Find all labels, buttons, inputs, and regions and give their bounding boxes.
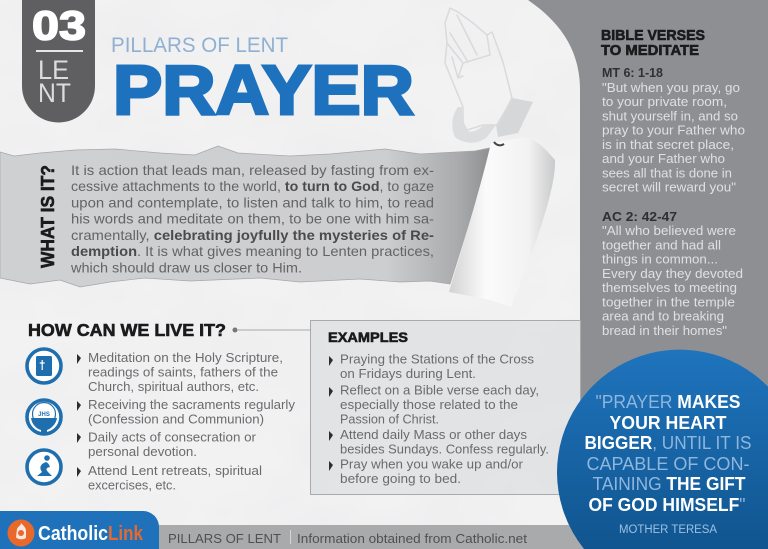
text block: Matthew verse (602, 66, 745, 194)
bullet item: meditation: Church, spiritual authors, etc. (88, 380, 259, 394)
bullet item: pray: Pray when you wake up and/or (340, 458, 523, 472)
heading: bible verses: TO MEDITATE (601, 43, 699, 59)
callout: Mother Teresa quote: TAINING THE GIFT (592, 474, 746, 494)
bullet item: bible verse (329, 384, 539, 426)
text block: Matthew verse: sees all that is done in (602, 166, 732, 180)
icon: hands sleeve shadow (452, 107, 496, 143)
bullet item: bible verse: Passion of Christ. (340, 412, 439, 426)
icon: praying hands (445, 8, 533, 143)
heading: how can we live it: HOW CAN WE LIVE IT? (28, 320, 226, 340)
text block: Matthew verse: is in that secret place, (602, 138, 734, 152)
bullet item: mass (329, 428, 549, 456)
text block: Acts verse: area and to breaking (602, 310, 724, 324)
panel: torn band what is it (0, 146, 494, 287)
logo: Catholic Link: Link (108, 523, 144, 545)
text block: description: upon and contemplate, to listen and talk to him, to read (71, 196, 434, 210)
bullet item: sacraments (77, 398, 296, 426)
badge: 03 Lent: NT (38, 78, 71, 108)
bullet item: meditation: readings of saints, fathers of the (88, 366, 278, 380)
heading: pillars of lent: PILLARS OF LENT (111, 34, 288, 57)
bullet item: meditation: Meditation on the Holy Scripture, (88, 351, 283, 365)
callout: Mother Teresa quote: YOUR HEART (610, 413, 726, 433)
bullet item: retreats: Attend Lent retreats, spiritual (88, 464, 262, 478)
heading: how can we live it (28, 320, 310, 340)
callout: Mother Teresa quote: MOTHER TERESA (619, 524, 717, 536)
bullet item: bible verse: especially those related to the (340, 398, 518, 412)
panel: crumpled paper background (0, 0, 580, 549)
text block: Matthew verse: "But when you pray, go (602, 81, 740, 95)
bullet item: pray: before going to bed. (340, 472, 461, 486)
bullet item: sacraments: (Confession and Communion) (88, 412, 264, 426)
heading: examples: EXAMPLES (328, 329, 408, 345)
text block: Matthew verse: secret will reward you" (602, 180, 736, 194)
text block: Acts verse: together in the temple (602, 296, 735, 310)
footer bar (150, 525, 590, 549)
bullet item: mass: besides Sundays. Confess regularly. (340, 442, 549, 456)
text block: Acts verse (602, 210, 743, 338)
text block: Acts verse: AC 2: 42-47 (602, 210, 677, 224)
text block: Matthew verse: MT 6: 1-18 (602, 66, 663, 80)
text block: description: It is action that leads man, released by fasting from ex- (71, 163, 434, 178)
text block: Matthew verse: shut yourself in, and so (602, 110, 738, 124)
text block: Acts verse: "All who believed were (602, 224, 736, 238)
text block: description: cessive attachments to the world, to turn to God , to gaze (71, 179, 434, 194)
text block: Acts verse: bread in their homes" (602, 324, 727, 338)
icon: curled paper roll (449, 137, 555, 307)
badge: 03 Lent (22, 0, 95, 122)
text block: Matthew verse: to your private room, (602, 95, 727, 109)
callout: Mother Teresa quote: OF GOD HIMSELF" (588, 495, 746, 515)
bullet item: stations: on Fridays during Lent. (340, 367, 476, 381)
bullet item: meditation (77, 351, 283, 394)
logo: Catholic Link: Catholic (38, 523, 108, 545)
text block: Acts verse: Every day they devoted (602, 267, 743, 281)
icon: hands cuff (496, 98, 533, 137)
bullet item: pray (329, 458, 523, 486)
heading: bible verses (601, 28, 705, 59)
badge: 03 Lent: 03 (32, 2, 86, 48)
footer bar: Information obtained from Catholic.net (297, 531, 527, 546)
bullet item: consecration: personal devotion. (88, 445, 197, 459)
text block: Acts verse: together and had all (602, 238, 721, 252)
text block: description: cramentally, celebrating joyfully the mysteries of Re- (71, 228, 434, 243)
footer bar: PILLARS OF LENT (168, 531, 281, 546)
text block: Acts verse: things in common... (602, 252, 718, 266)
heading: bible verses: BIBLE VERSES (601, 28, 705, 44)
callout: Mother Teresa quote: CAPABLE OF CON- (586, 454, 750, 474)
heading: what is it: WHAT IS IT? (38, 165, 58, 268)
text block: Matthew verse: pray to your Father who (602, 124, 745, 138)
callout: Mother Teresa quote (557, 350, 768, 549)
icon: chalice and host: JHS (38, 412, 50, 418)
bullet item: bible verse: Reflect on a Bible verse each day, (340, 384, 539, 398)
bullet item: sacraments: Receiving the sacraments regularly (88, 398, 296, 412)
bullet item: stations (329, 352, 534, 381)
text block: Acts verse: themselves to meeting (602, 281, 737, 295)
icon: kneeling person (27, 450, 61, 484)
badge: 03 Lent: LE (38, 55, 69, 85)
bullet item: consecration (77, 430, 256, 459)
logo: Catholic Link (0, 511, 159, 549)
text block: description: his words and meditate on them, to be one with him sa- (71, 212, 434, 226)
panel: examples (310, 320, 580, 494)
callout: Mother Teresa quote: BIGGER, UNTIL IT IS (584, 433, 752, 453)
title: prayer: PRAYER (113, 51, 414, 129)
icon: bible (27, 349, 61, 383)
bullet item: consecration: Daily acts of consecration or (88, 430, 256, 444)
icon: chalice and host (27, 400, 61, 434)
callout: Mother Teresa quote: "PRAYER MAKES (596, 392, 740, 412)
bullet item: retreats (77, 464, 262, 492)
text block: description (70, 163, 434, 276)
bullet item: retreats: excercises, etc. (88, 478, 176, 492)
text block: description: which should draw us closer to Him. (70, 260, 302, 276)
icon: logo flame (8, 520, 34, 546)
text block: description: demption . It is what gives meaning to Lenten practices, (71, 244, 434, 259)
panel: bible verses (601, 28, 745, 338)
bullet item: mass: Attend daily Mass or other days (340, 428, 527, 442)
list: how can we live it (77, 351, 296, 492)
bullet item: stations: Praying the Stations of the Cross (340, 352, 534, 366)
text block: Matthew verse: and your Father who (602, 152, 725, 166)
